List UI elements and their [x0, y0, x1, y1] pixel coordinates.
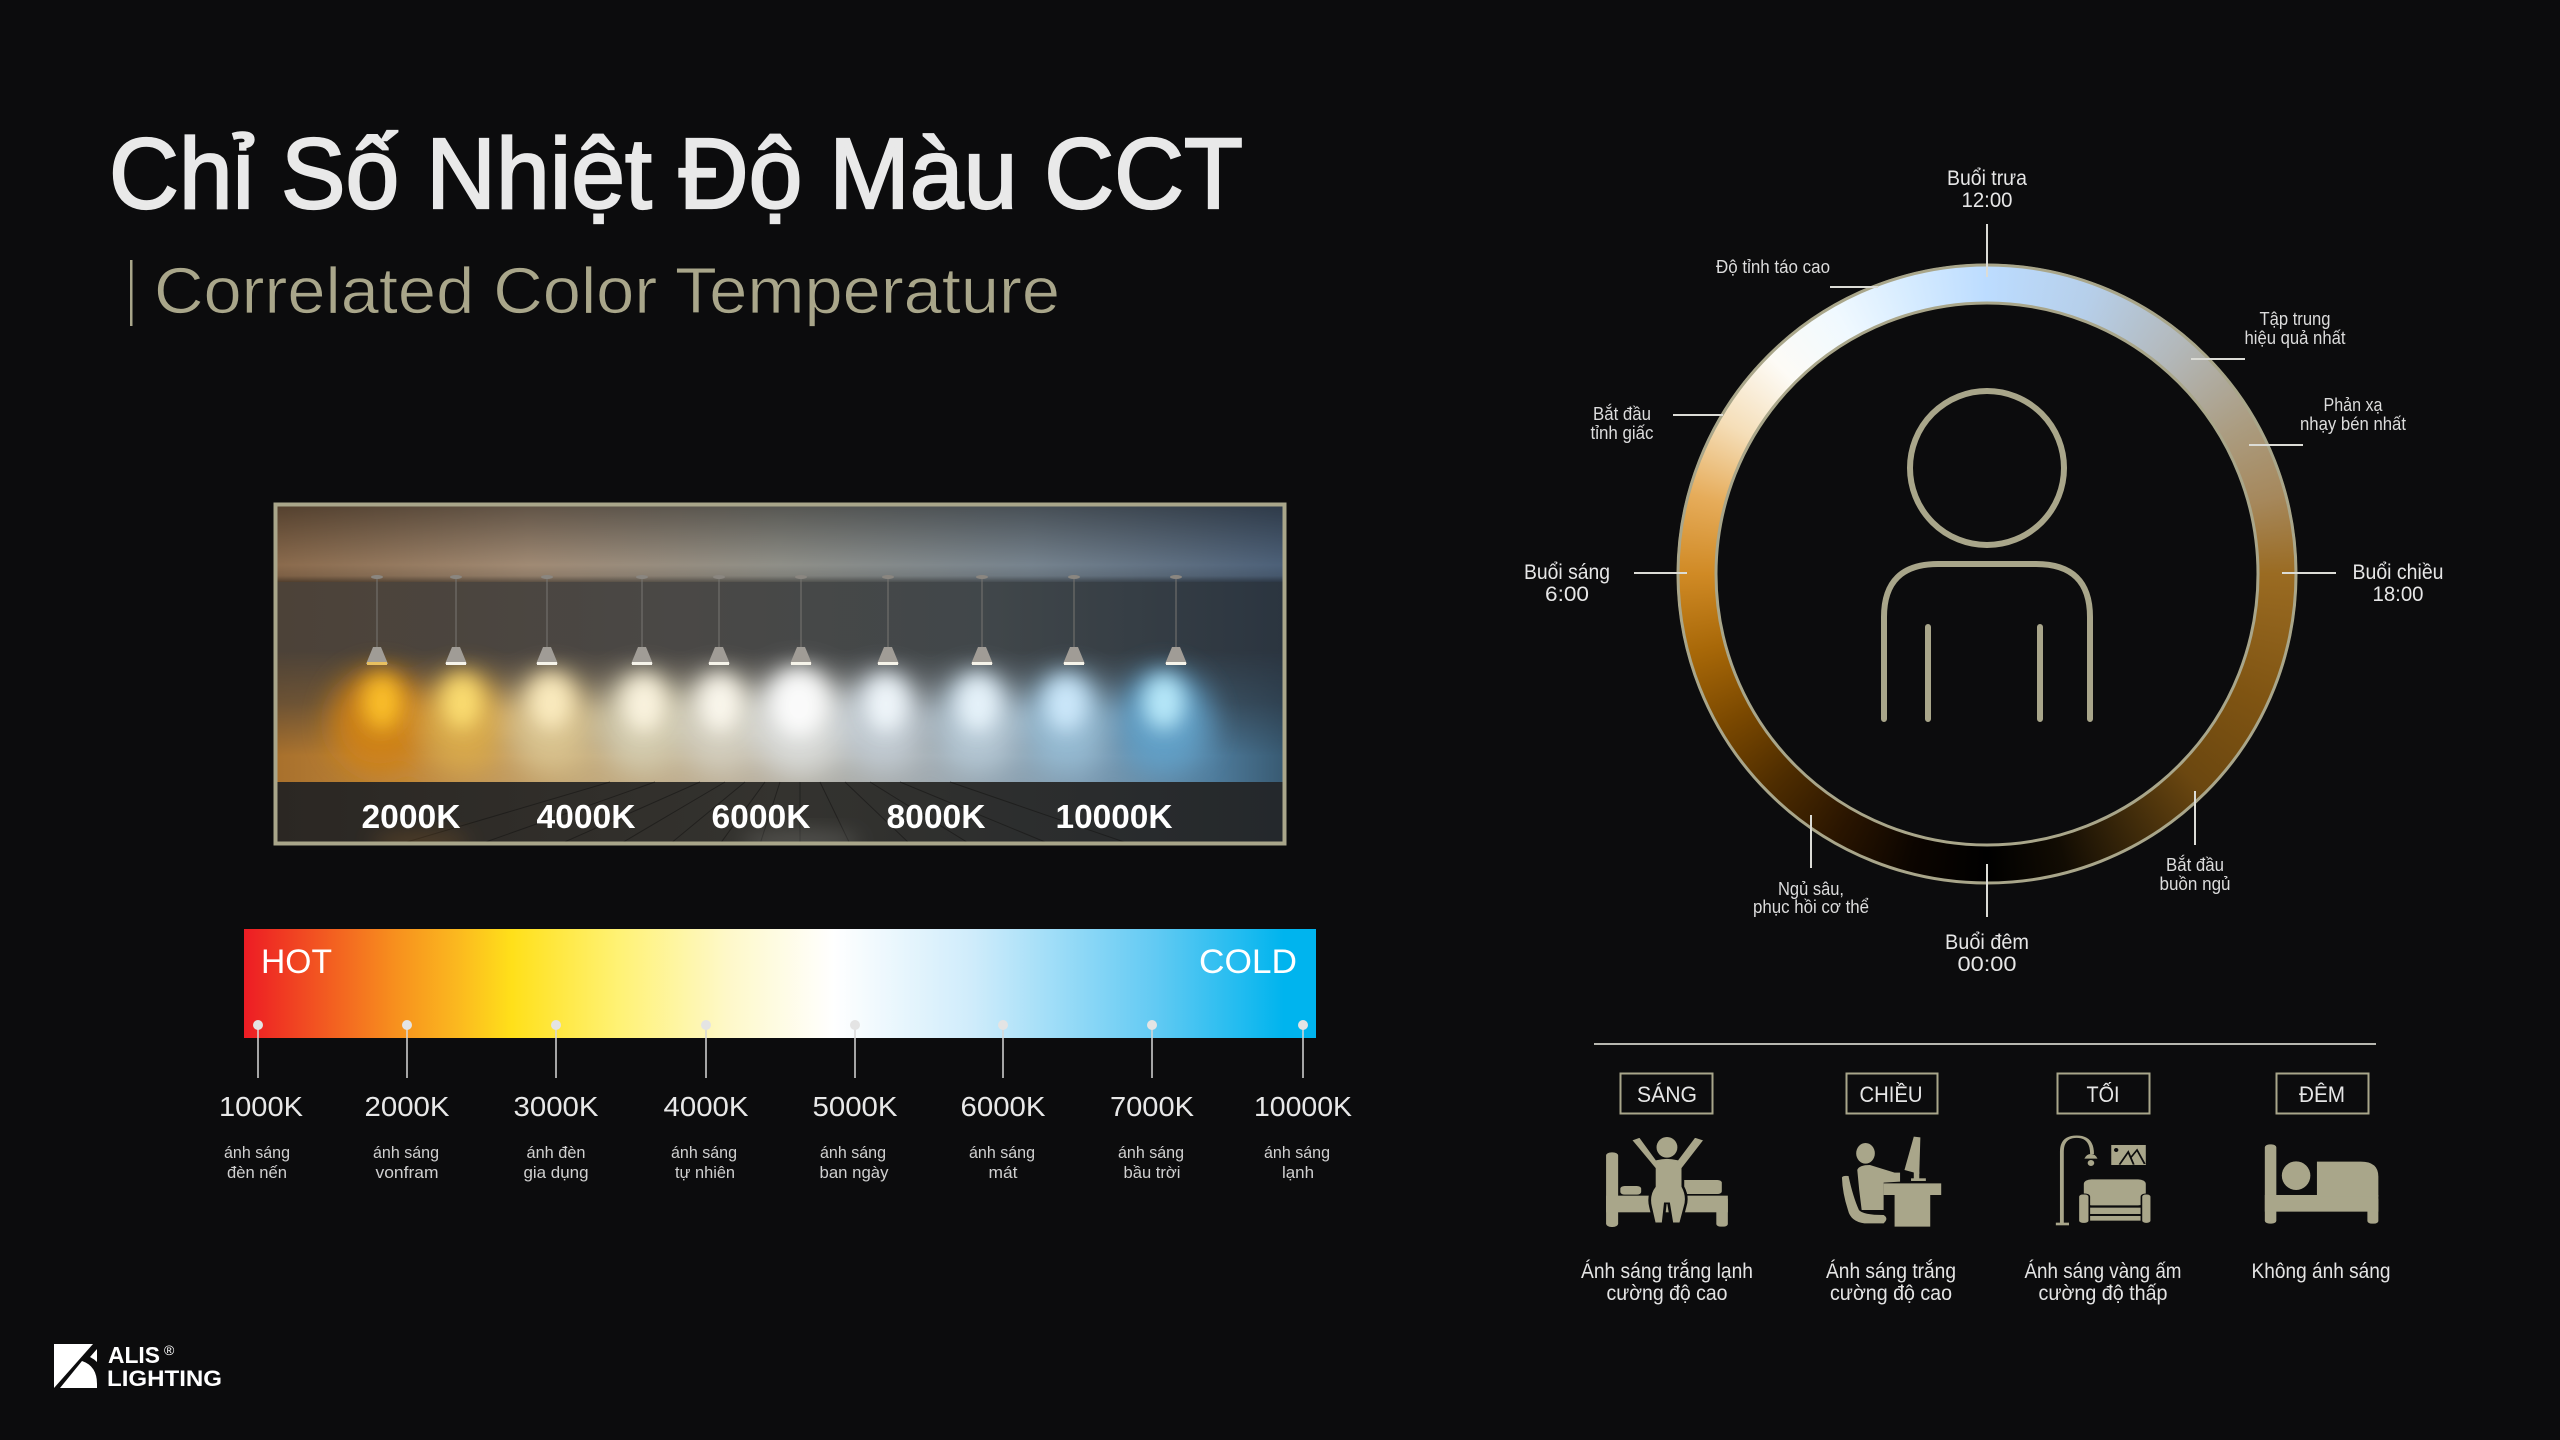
gradient bar: hot to cold: COLD [1199, 943, 1297, 981]
scale labels: bầu trời [1124, 1163, 1180, 1182]
gradient bar: hot to cold [244, 929, 1316, 1038]
panel: ĐÊM: Không ánh sáng [2252, 1260, 2390, 1283]
photo: pendant lamps across colour temperatures: 4000K [536, 798, 636, 835]
scale labels: 5000K [812, 1091, 898, 1122]
photo: pendant lamps across colour temperatures: 6000K [712, 798, 811, 835]
ring callout labels: Độ tỉnh táo cao [1716, 257, 1830, 277]
ring callout labels: Buổi đêm [1945, 931, 2029, 954]
icon: working at a desk [1842, 1137, 1941, 1227]
scale labels: 1000K [219, 1091, 303, 1122]
ring callout labels [1524, 167, 2444, 976]
logo: ALIS Lighting: LIGHTING [107, 1366, 222, 1391]
floor [276, 782, 1284, 844]
title: Chỉ Số Nhiệt Độ Màu CCT [109, 118, 1243, 230]
photo: pendant lamps across colour temperatures: 8000K [886, 798, 986, 835]
scale labels: ban ngày [820, 1163, 889, 1182]
ring callout labels: 00:00 [1958, 953, 2016, 976]
scale labels: gia dụng [524, 1163, 588, 1182]
ring callout labels: 6:00 [1545, 583, 1589, 606]
ring callout labels: buồn ngủ [2160, 874, 2230, 894]
panel: ĐÊM [2252, 1074, 2390, 1283]
ring callout labels: Ngủ sâu, [1778, 879, 1844, 899]
ring callout labels: Bắt đầu [2166, 854, 2224, 875]
scale labels: ánh sáng [671, 1143, 737, 1162]
scale labels: mát [988, 1163, 1018, 1182]
icon: waking up in bed [1606, 1137, 1728, 1227]
ring callout labels: Buổi chiều [2352, 561, 2444, 584]
scale labels: vonfram [376, 1163, 438, 1182]
scale labels: 3000K [514, 1091, 599, 1122]
scale labels: 6000K [960, 1091, 1046, 1122]
ring callout labels: phục hồi cơ thể [1753, 897, 1869, 917]
scale labels: 4000K [664, 1091, 749, 1122]
scale labels: ánh đèn [526, 1143, 586, 1162]
scale labels: ánh sáng [1264, 1143, 1330, 1162]
wires [377, 577, 1176, 648]
panel: CHIỀU: Ánh sáng trắng [1826, 1260, 1956, 1283]
ring callout labels: Buổi sáng [1524, 561, 1610, 584]
scale labels: ánh sáng [1118, 1143, 1184, 1162]
panel: SÁNG: cường độ cao [1606, 1282, 1728, 1305]
scale labels: ánh sáng [373, 1143, 439, 1162]
panel: TỐI: cường độ thấp [2038, 1282, 2168, 1305]
logo: ALIS Lighting [54, 1342, 222, 1391]
circadian ring [1676, 263, 2298, 885]
scale labels: tự nhiên [675, 1163, 735, 1182]
ring callout labels: Tập trung [2260, 309, 2330, 329]
scale labels: lạnh [1282, 1163, 1314, 1182]
ring callout labels: nhạy bén nhất [2300, 414, 2406, 434]
panel: ĐÊM: ĐÊM [2299, 1082, 2345, 1107]
panel: TỐI: Ánh sáng vàng ấm [2024, 1260, 2182, 1283]
panel: SÁNG: Ánh sáng trắng lạnh [1581, 1260, 1753, 1283]
gradient bar: hot to cold: HOT [261, 943, 332, 981]
scale labels: 10000K [1254, 1091, 1352, 1122]
scale labels: 2000K [364, 1091, 450, 1122]
logo: ALIS Lighting: ALIS [108, 1342, 160, 1368]
ring callout labels: 12:00 [1962, 189, 2012, 212]
scale labels [219, 1091, 1352, 1182]
panel: CHIỀU: CHIỀU [1860, 1082, 1922, 1107]
icon: person in ring [1884, 391, 2090, 719]
scale labels: đèn nến [227, 1163, 287, 1182]
logo: ALIS Lighting: ® [164, 1342, 175, 1358]
subtitle: Correlated Color Temperature [154, 254, 1060, 327]
ring callout labels: 18:00 [2372, 583, 2424, 606]
photo: pendant lamps across colour temperatures: 10000K [1056, 798, 1173, 835]
scale labels: ánh sáng [820, 1143, 886, 1162]
scale labels: 7000K [1110, 1091, 1194, 1122]
scale ticks and dots [253, 1020, 1308, 1078]
ring callout labels: hiệu quả nhất [2244, 328, 2346, 348]
panel: TỐI [2024, 1074, 2182, 1305]
icon: sofa and floor lamp [2056, 1137, 2151, 1225]
panel: CHIỀU: cường độ cao [1830, 1282, 1952, 1305]
photo: pendant lamps across colour temperatures [274, 503, 1286, 854]
panel: CHIỀU [1826, 1074, 1956, 1305]
light cones [330, 668, 1212, 776]
ring callout lines [1634, 224, 2336, 917]
scale labels: ánh sáng [224, 1143, 290, 1162]
ring callout labels: Buổi trưa [1947, 167, 2027, 190]
panel: SÁNG: SÁNG [1637, 1082, 1697, 1107]
ring callout labels: tỉnh giấc [1590, 423, 1654, 443]
ring callout labels: Bắt đầu [1593, 403, 1651, 424]
panel: TỐI: TỐI [2086, 1081, 2120, 1107]
divider [1594, 1043, 2376, 1045]
lamp bodies [366, 647, 1187, 664]
scale labels: ánh sáng [969, 1143, 1035, 1162]
photo: pendant lamps across colour temperatures: 2000K [362, 798, 461, 835]
ring callout labels: Phản xạ [2324, 395, 2383, 415]
icon: sleeping in bed [2265, 1144, 2378, 1224]
panel: SÁNG [1581, 1074, 1753, 1305]
